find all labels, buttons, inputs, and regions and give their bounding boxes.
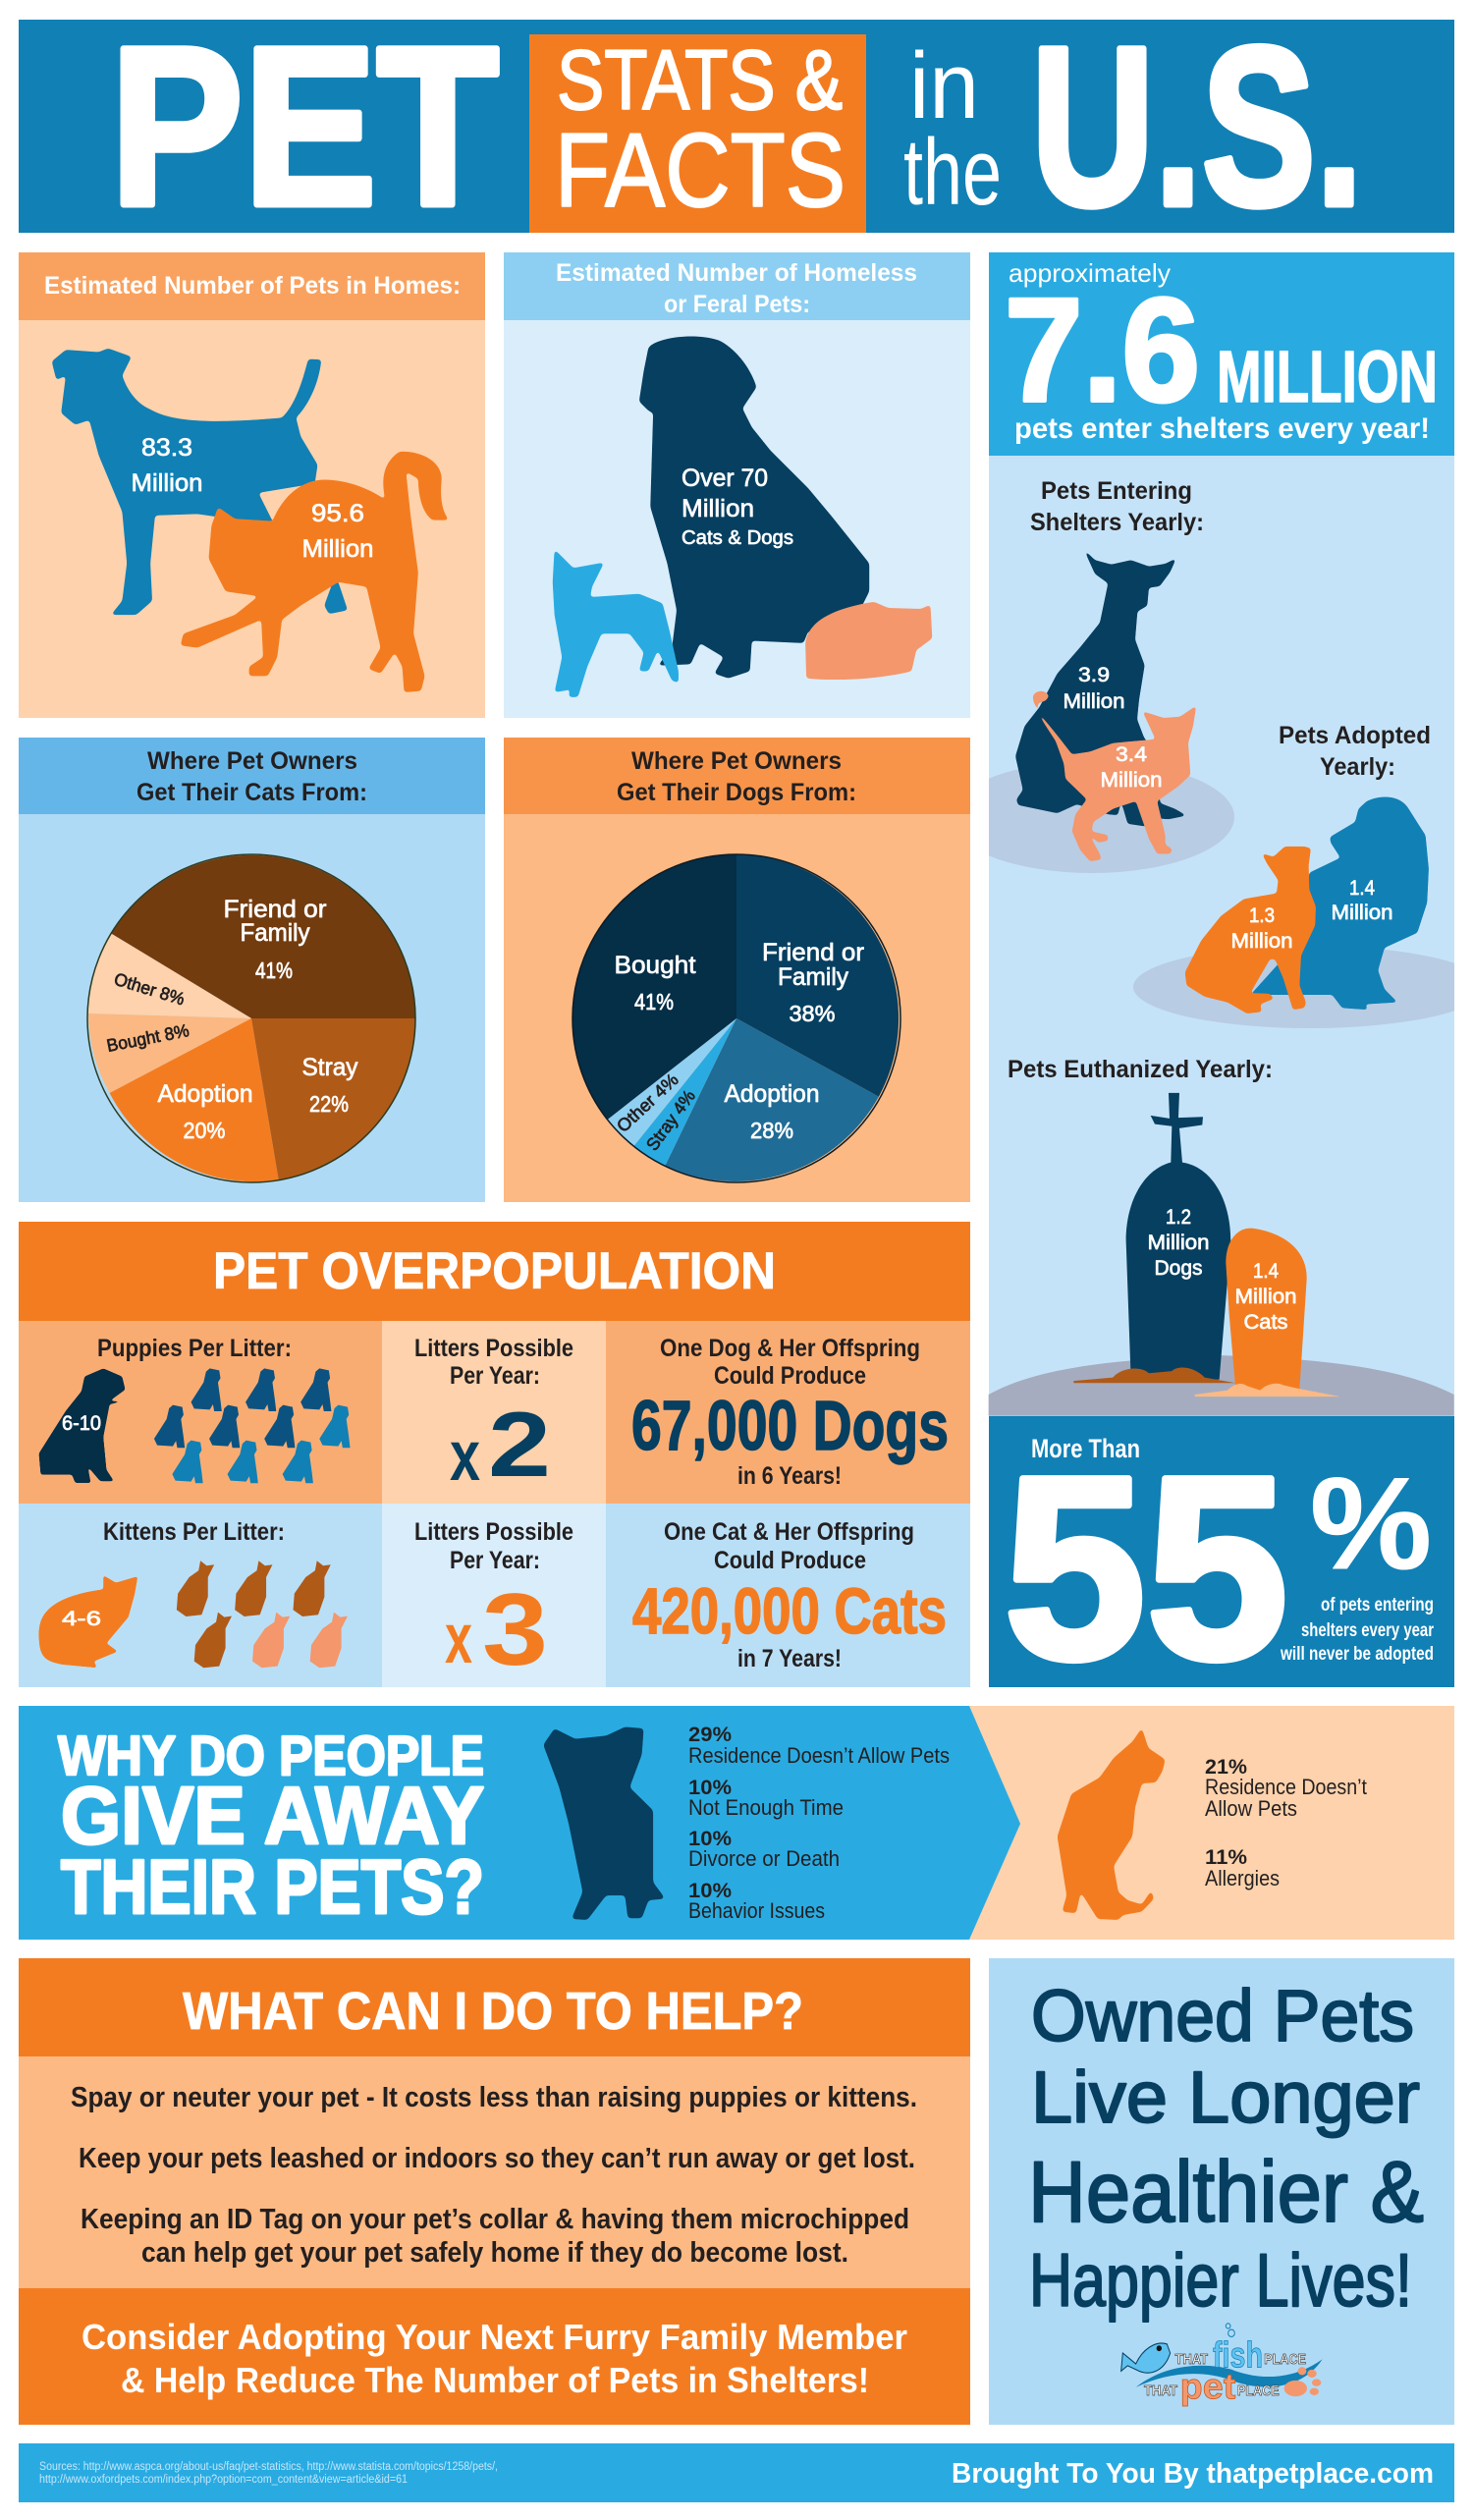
icon: salmon cat [805,602,932,680]
heading: pets adopted: Yearly: [1320,753,1395,781]
icon: blue dog [52,349,348,615]
pie label: friend or family 41%: Friend or [224,896,326,923]
label: 3.4 million: 3.4 [1116,743,1147,766]
text: help tips: can help get your pet safely home if they do become lost. [141,2237,848,2269]
list: dog reasons: 10% [688,1828,732,1850]
stat: 420,000 cats: in 7 Years! [737,1645,842,1672]
label: 1.3 million [1231,904,1292,953]
pie label: stray 22% [302,1054,358,1117]
pie label: friend or family 38%: Family [778,963,848,991]
heading: homeless pets [556,259,917,318]
stat: 420,000 cats [632,1518,947,1672]
label: 1.4 million [1332,877,1392,924]
text: adoption message [82,2317,907,2400]
logo: that fish place, that pet place: fish [1213,2335,1263,2376]
heading: dogs [617,747,856,806]
text: owned pets live longer [1028,1975,1424,2323]
icon: salmon cat [1033,691,1196,861]
pie label: stray 22%: Stray [302,1054,358,1081]
litters per year: dogs: 2 [488,1393,551,1496]
heading: pets entering [1030,477,1204,536]
stat: 67,000 dogs: 67,000 Dogs [631,1388,949,1465]
label: 83.3 million: 83.3 [141,434,192,462]
group: pets entering shelters [950,477,1234,873]
kittens per litter: Kittens Per Litter: [103,1518,285,1546]
puppies per litter: 6-10 [62,1412,101,1435]
callout: more than 55%: will never be adopted [1280,1644,1434,1665]
callout: more than 55%: More Than [1031,1434,1140,1463]
title: U.S.: U.S. [1031,0,1363,252]
pie label: friend or family 38%: 38% [790,1001,835,1026]
label: 1.2 million dogs [1147,1206,1210,1280]
panel: cats pie [19,738,485,1202]
icon: big dark dog [639,336,869,679]
pie label: other 8%: Other 8% [112,969,187,1009]
litters per year: cats [414,1518,573,1687]
icon: cat [1058,1727,1166,1920]
list: cat reasons: Allergies [1205,1866,1280,1890]
heading: dogs: Where Pet Owners [631,747,842,775]
label: 3.4 million [1100,743,1163,792]
text: help tips: Spay or neuter your pet - It costs less than raising puppies or kittens. [71,2082,917,2113]
panel: homeless pets [504,252,970,718]
label: 1.2 million dogs: Dogs [1155,1257,1202,1280]
litters per year: cats: x [445,1600,472,1678]
logo: that fish place, that pet place: PLACE [1264,2350,1306,2367]
heading: dogs: Get Their Dogs From: [617,779,856,806]
title banner [19,0,1454,252]
list: cat reasons: 21% [1205,1756,1247,1779]
stat: 420,000 cats: 420,000 Cats [632,1574,947,1647]
label: 83.3 million: Million [132,469,202,497]
text: adoption message: & Help Reduce The Number of Pets in Shelters! [121,2360,869,2400]
heading: pets entering: Shelters Yearly: [1030,509,1204,536]
panel: pet overpopulation [19,1222,970,1687]
panel: pets in homes [19,252,485,718]
heading: why do people give away their pets: THEIR PETS? [61,1843,484,1930]
ground [989,1355,1454,1416]
icon: big cat [39,1575,137,1668]
callout: more than 55%: 55 [1004,1423,1288,1714]
label: 1.3 million: 1.3 [1249,904,1275,927]
callout: 7.6 million: pets enter shelters every year! [1014,412,1430,445]
title: stats and facts [555,33,846,229]
label: 1.4 million cats [1235,1260,1296,1334]
sources [39,2461,498,2486]
pie label: bought 8%: Bought 8% [105,1020,191,1056]
litters per year: cats: 3 [482,1573,548,1687]
panel: why give away [19,1706,1454,1940]
icon: small blue dog [553,549,679,697]
text: adoption message: Consider Adopting Your Next Furry Family Member [82,2317,907,2357]
heading: why do people give away their pets [58,1725,484,1930]
label: 1.4 million cats: Million [1235,1286,1296,1308]
label: over 70 million: Over 70 [682,465,768,492]
callout: 7.6 million: 7.6 [1005,267,1200,432]
icons: kittens [177,1561,348,1668]
heading: cats: Get Their Cats From: [136,779,367,806]
pie label: friend or family 38% [762,939,864,1026]
title: in the [903,33,1002,225]
heading: pets adopted: Pets Adopted [1279,722,1431,749]
kittens per litter [39,1518,348,1668]
text: owned pets live longer: Healthier & [1028,2143,1424,2240]
stat: 67,000 dogs [631,1335,949,1490]
icon: dog [543,1726,666,1920]
callout: more than 55%: of pets entering [1321,1595,1434,1616]
callout: more than 55%: shelters every year [1301,1620,1434,1641]
pie label: adoption 20% [157,1080,253,1143]
label: 3.4 million: Million [1100,769,1163,792]
stat: 67,000 dogs: in 6 Years! [737,1462,842,1490]
label: 1.4 million: Million [1332,902,1392,924]
label: over 70 million: Million [682,495,754,522]
list: dog reasons: Divorce or Death [688,1846,840,1871]
label: 3.9 million [1063,664,1125,713]
kittens per litter: 4-6 [62,1608,101,1630]
footer [19,2443,1454,2502]
heading: why do people give away their pets: GIVE AWAY [61,1770,484,1861]
litters per year: dogs: Litters Possible [414,1335,573,1362]
puppies per litter [39,1335,351,1483]
heading: cats [136,747,367,806]
pie label: friend or family 41% [224,896,326,983]
stat: 420,000 cats: Could Produce [714,1547,866,1574]
label: over 70 million [682,465,793,549]
heading: what can I do: WHAT CAN I DO TO HELP? [183,1982,803,2041]
panel: what can I do to help [19,1958,970,2425]
title: in the: in [909,33,979,138]
heading: homeless pets: Estimated Number of Homeless [556,259,917,287]
heading: pets entering: Pets Entering [1041,477,1192,505]
label: 1.4 million: 1.4 [1349,877,1375,900]
logo: that fish place, that pet place: pet [1180,2367,1236,2407]
callout: more than 55%: % [1310,1452,1432,1597]
panel: owned pets [989,1958,1454,2425]
label: 1.4 million cats: 1.4 [1253,1260,1279,1283]
label: 95.6 million: 95.6 [311,500,364,527]
list: dog reasons: 29% [688,1724,732,1746]
heading: pets in homes: Estimated Number of Pets in Homes: [44,272,461,300]
sources: Sources: http://www.aspca.org/about-us/faq/pet-statistics, http://www.statista.com/topics/1258/pets/, [39,2461,498,2473]
list: cat reasons: 11% [1205,1846,1247,1869]
heading: homeless pets: or Feral Pets: [664,291,810,318]
label: 83.3 million [132,434,202,497]
list: dog reasons [688,1724,950,1923]
panel: shelters column [988,252,1454,1416]
list: dog reasons: 10% [688,1880,732,1902]
panel: dogs pie [504,738,970,1202]
heading: pets adopted [1279,722,1431,781]
stat: 420,000 cats: One Cat & Her Offspring [664,1518,914,1546]
pie label: friend or family 38%: Friend or [762,939,864,966]
list: dog reasons: Not Enough Time [688,1795,844,1820]
stat: 67,000 dogs: One Dog & Her Offspring [660,1335,920,1362]
icon: blue dog [1250,797,1429,1010]
pie label: stray 4%: Stray 4% [642,1086,699,1154]
puppies per litter: Puppies Per Litter: [97,1335,292,1362]
litters per year: dogs: Per Year: [450,1362,540,1390]
text: owned pets live longer: Owned Pets [1031,1975,1414,2056]
callout: more than 55% [989,1416,1454,1714]
callout: 7.6 million [989,252,1454,456]
group: pets adopted [1133,722,1473,1028]
pie label: friend or family 41%: Family [240,919,310,947]
list: cat reasons: Allow Pets [1205,1796,1297,1821]
logo: that fish place, that pet place: THAT [1144,2382,1177,2398]
label: over 70 million: Cats & Dogs [682,527,793,549]
pie label: bought 41% [615,952,696,1014]
group: pets euthanized [989,1056,1454,1416]
pie label: adoption 28% [725,1080,819,1143]
list: dog reasons: Residence Doesn’t Allow Pets [688,1743,950,1768]
text: help tips: Keep your pets leashed or indoors so they can’t run away or get lost. [79,2143,915,2174]
pie label: adoption 20%: Adoption [157,1080,253,1108]
litters per year: cats: Per Year: [450,1547,540,1574]
title: stats and facts: FACTS [555,111,846,229]
pie label: friend or family 41%: 41% [255,958,293,983]
title: PET: PET [110,0,499,252]
text: help tips [71,2082,917,2269]
label: 1.2 million dogs: Million [1147,1232,1210,1254]
heading: why do people give away their pets: WHY DO PEOPLE [58,1725,484,1787]
label: 1.2 million dogs: 1.2 [1166,1206,1191,1229]
icon: orange cat [181,452,449,692]
text: owned pets live longer: Live Longer [1031,2056,1420,2138]
icon: big dog [39,1368,126,1483]
list: cat reasons [1205,1756,1367,1890]
title: in the: the [903,120,1002,225]
pie label: adoption 20%: 20% [183,1118,226,1143]
pie chart: dogs [573,854,900,1182]
litters per year: cats: Litters Possible [414,1518,573,1546]
logo: that fish place, that pet place [1121,2324,1323,2407]
pie label: bought 41%: Bought [615,952,696,979]
logo: that fish place, that pet place: THAT [1175,2350,1208,2367]
stat: 67,000 dogs: Could Produce [714,1362,866,1390]
text: help tips: Keeping an ID Tag on your pet’s collar & having them microchipped [81,2204,909,2235]
label: 3.9 million: 3.9 [1078,664,1110,686]
pie label: other 4%: Other 4% [613,1069,682,1136]
title: stats and facts: STATS & [557,33,843,128]
icon: dark dog [1015,549,1186,827]
litters per year: dogs [414,1335,573,1496]
heading: cats: Where Pet Owners [147,747,357,775]
logo: that fish place, that pet place: PLACE [1237,2382,1280,2398]
icon: cat tombstone [1195,1229,1340,1397]
heading: pet overpopulation: PET OVERPOPULATION [213,1242,776,1300]
callout: 7.6 million: approximately [1009,258,1171,288]
label: 95.6 million: Million [302,535,373,563]
credit: Brought To You By thatpetplace.com [952,2458,1434,2490]
icon: orange cat [1185,847,1316,1013]
pie label: bought 41%: 41% [634,989,674,1014]
label: 1.3 million: Million [1231,930,1292,953]
label: 3.9 million: Million [1063,690,1125,713]
pie chart: cats [87,854,415,1182]
heading: pets euthanized: Pets Euthanized Yearly: [1008,1056,1273,1083]
icon: dog tombstone [1073,1093,1235,1383]
litters per year: dogs: x [450,1417,480,1496]
icons: puppies [154,1368,351,1483]
pie label: stray 22%: 22% [309,1091,349,1117]
pie label: adoption 28%: Adoption [725,1080,819,1108]
sources: http://www.oxfordpets.com/index.php?option=com_content&view=article&id=61 [39,2474,408,2486]
list: dog reasons: Behavior Issues [688,1898,825,1923]
list: cat reasons: Residence Doesn’t [1205,1775,1367,1799]
label: 95.6 million [302,500,373,563]
label: 1.4 million cats: Cats [1243,1311,1288,1334]
pie label: adoption 28%: 28% [750,1118,793,1143]
list: dog reasons: 10% [688,1777,732,1799]
